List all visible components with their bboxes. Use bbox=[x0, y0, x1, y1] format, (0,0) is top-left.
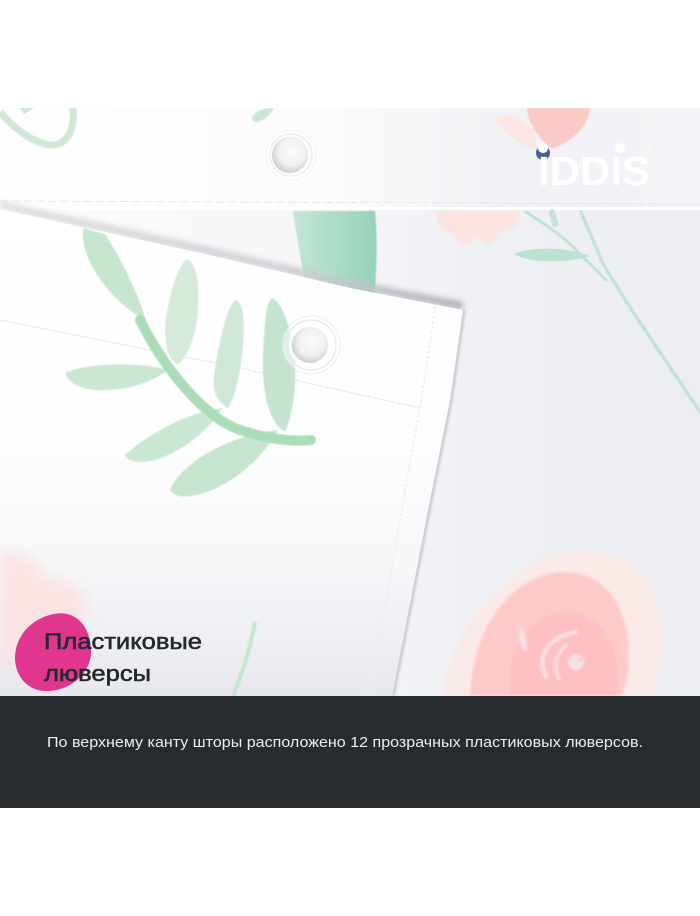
logo: IDDIS: ® bbox=[648, 146, 654, 154]
pink flower top right bbox=[495, 108, 590, 150]
grommet: lower bbox=[282, 316, 340, 374]
green leaf right bbox=[514, 249, 590, 261]
logo: IDDIS: IDDIS bbox=[538, 148, 650, 194]
green stems right bbox=[526, 212, 700, 412]
front curtain panel bbox=[0, 205, 464, 696]
green branch with leaves bbox=[65, 228, 311, 496]
side stitch bbox=[384, 306, 436, 614]
green stem bottom bbox=[233, 622, 255, 696]
panel: dark caption bar bbox=[0, 696, 700, 808]
heading: Пластиковые bbox=[44, 629, 202, 654]
panel: curtain photo bbox=[0, 108, 700, 696]
large green leaf behind fold bbox=[293, 211, 377, 294]
grommet: upper bbox=[266, 130, 316, 180]
caption text: По верхнему канту шторы расположено 12 прозрачных пластиковых люверсов. bbox=[47, 735, 643, 751]
pink accent blob bbox=[15, 613, 91, 691]
heading: люверсы bbox=[44, 661, 151, 686]
pink flower blur left bbox=[0, 552, 87, 668]
green leaf tip top bbox=[252, 108, 274, 122]
pink flower below hem bbox=[436, 212, 520, 245]
green stem loop top left bbox=[0, 108, 73, 145]
fold shadow bbox=[0, 205, 463, 306]
rose bbox=[443, 551, 663, 696]
top hem of back curtain bbox=[0, 108, 700, 210]
hem stitch bbox=[0, 320, 420, 408]
